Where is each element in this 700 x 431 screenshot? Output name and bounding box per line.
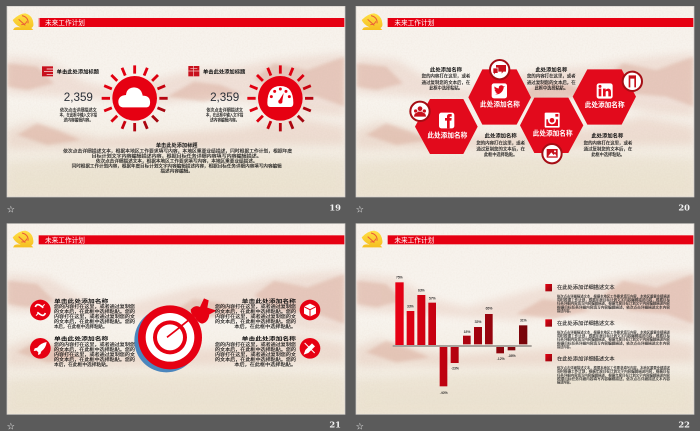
description right: 述内容编辑内容。: [210, 116, 239, 123]
text block: lower right: 单击此处添加名称: [242, 334, 297, 342]
text block: upper right: [215, 297, 297, 330]
description right: 本，在此框中输入文字描: [206, 111, 244, 118]
text block: upper right: 的文本后，在此框中选择粘贴。您的: [215, 308, 297, 315]
legend item 2: 依次点击详细描述文本，根据本地区工作要求填写内容，本地区重要业绩描述: [557, 329, 671, 334]
legend item 2: 描述内容。: [557, 344, 573, 349]
legend item 1: 依次点击详细描述文本，根据本地区工作要求填写内容，本地区重要业绩描述: [557, 293, 671, 298]
legend item 2: 在此处添加详细描述文本: [557, 320, 615, 327]
header bar: [388, 18, 693, 27]
text block: lower left: 的文本后，在此框中选择粘贴。您的: [54, 356, 136, 363]
text block: upper right: 您的内容打在这里，或者通过复制您: [215, 303, 297, 310]
badge: picture: [542, 144, 562, 163]
text block: upper left: 的文本后，在此框中选择粘贴。您的: [54, 308, 136, 315]
bar chart: -23%: [451, 367, 459, 371]
badge: people: [410, 102, 430, 121]
text block: top left: 此框中选择粘贴。: [429, 85, 463, 92]
description right: 依次点击详细描述文: [206, 106, 244, 113]
description left: [60, 106, 98, 123]
text block: upper left: [54, 297, 136, 330]
legend item 3: 同时根据工作计划，根据年度目标计划文字内容编辑描述内容，根据目标: [557, 369, 671, 374]
icon: cube: [300, 300, 320, 320]
text block: lower right: 本后，在此框中选择粘贴。: [234, 361, 296, 368]
bottom text block: 描述内容编辑。: [160, 167, 193, 174]
text block: lower left: [54, 334, 136, 368]
text block: top left: [422, 65, 471, 92]
icon: small list: [42, 66, 53, 76]
text block: upper right: 本后，在此框中选择粘贴。: [234, 323, 296, 330]
legend item 3: [545, 354, 671, 385]
slide background: [356, 6, 694, 197]
text block: upper left: 您的内容打在这里，或者通过复制您: [54, 303, 136, 310]
text block: upper left: 的文本后，在此框中选择粘贴。您的: [54, 318, 136, 325]
text block: upper left: 单击此处添加名称: [54, 297, 109, 305]
text block: top left: 通过复制您的文本后，在: [422, 79, 471, 86]
bottom text block: 目标计划文字内容编辑描述内容，根据目标任务详细内容填写内容编辑描述。: [92, 152, 262, 159]
statistic right: 2,359: [210, 91, 239, 104]
statistic left: 2,359: [64, 91, 93, 104]
text block: top middle: 此处添加名称: [535, 65, 568, 73]
legend item 1: [545, 284, 671, 313]
hexagon: instagram: [520, 98, 583, 153]
legend item 3: 任务详细内容填写内容编辑描述，根据年度目标计划文字内容编辑描述内容: [557, 372, 671, 377]
subheading left: 单击此处添加标题: [57, 67, 100, 75]
bar chart: -12%: [497, 357, 505, 361]
header bar: [39, 18, 344, 27]
header bar: 未来工作计划: [394, 18, 435, 27]
text block: top left: 此处添加名称: [430, 65, 463, 73]
text block: lower right: 的文本后，在此框中选择粘贴。您的: [215, 346, 297, 353]
slide 22: [356, 223, 694, 431]
party emblem logo: [362, 13, 382, 30]
footer icon: ☆: [7, 204, 15, 215]
bottom text block: 单击此处添加标题: [156, 141, 198, 149]
bar chart: 31%: [520, 318, 527, 322]
text block: lower left: 单击此处添加名称: [54, 334, 109, 342]
slide number: 20: [678, 203, 690, 213]
slide background: [7, 223, 345, 415]
text block: lower left: 本后，在此框中选择粘贴。: [54, 361, 111, 368]
text block: top middle: 通过复制您的文本后，在: [527, 79, 576, 86]
sun icon: gauge: [247, 65, 313, 131]
text block: lower right: [215, 334, 297, 368]
text block: bottom right: 通过复制您的文本后，在: [584, 146, 633, 153]
text block: bottom middle: 此处添加名称: [485, 131, 517, 139]
text block: lower right: 的文本后，在此框中选择粘贴。您的: [215, 356, 297, 363]
party emblem logo: [13, 13, 33, 30]
slide number: 19: [329, 203, 341, 213]
text block: bottom right: 您的内容打在这里，或者: [584, 139, 633, 146]
bottom text block: [63, 141, 293, 174]
slide background: [7, 6, 345, 197]
legend item 2: 根据目标任务详细内容填写内容编辑描述，依次点击详细描述文本内容: [557, 340, 671, 345]
text block: upper right: 的文本后，在此框中选择粘贴。您的: [215, 318, 297, 325]
bar chart: 18%: [464, 330, 470, 334]
text block: bottom right: 此框中选择粘贴。: [591, 151, 625, 158]
party emblem logo: [13, 231, 33, 247]
subheading right: 单击此处添加标题: [203, 67, 246, 75]
text block: top middle: 您的内容打在这里，或者: [527, 73, 576, 80]
hexagon: instagram: 此处添加名称: [533, 129, 573, 138]
bar chart: 33%: [475, 320, 481, 324]
text block: top middle: [527, 65, 576, 92]
legend item 1: 同时根据工作计划，根据年度目标计划文字内容编辑描述内容，根据目标: [557, 297, 671, 302]
text block: bottom right: [584, 131, 633, 158]
text block: bottom middle: 此框中选择粘贴。: [484, 151, 517, 158]
bar chart: -08%: [508, 354, 516, 358]
legend item 2: 任务详细内容填写内容编辑描述，根据年度目标计划文字内容编辑描述内容: [557, 337, 671, 342]
legend item 3: 在此处添加详细描述文本: [557, 356, 615, 363]
sun icon: cloud: [102, 65, 168, 131]
hexagon: facebook: [415, 99, 478, 154]
header bar: 未来工作计划: [45, 18, 85, 27]
text block: top left: 您的内容打在这里，或者: [422, 73, 471, 80]
legend item 3: 描述内容。: [557, 380, 573, 385]
bar chart: -40%: [440, 391, 448, 395]
slide 19: [7, 6, 345, 215]
slide number: 21: [329, 420, 341, 430]
text block: bottom middle: [476, 131, 526, 158]
legend item 1: 在此处添加详细描述文本: [557, 284, 615, 291]
hexagon: facebook: 此处添加名称: [427, 130, 468, 139]
text block: lower left: 内容打在这里，或者通过复制您的文: [54, 351, 136, 358]
party emblem logo: [362, 231, 382, 247]
bar chart: 75%: [396, 275, 403, 279]
bar chart: 63%: [418, 288, 425, 292]
legend item 1: 根据目标任务详细内容填写内容编辑描述，依次点击详细描述文本内容: [557, 304, 671, 309]
bottom text block: 依次点击详细描述文本，根据本地区工作要求填写内容，本地区重要业绩描述，同时根据工作计划，根据年度: [63, 147, 293, 154]
legend item 3: 依次点击详细描述文本，根据本地区工作要求填写内容，本地区重要业绩描述: [557, 365, 671, 370]
text block: lower left: 您的内容打在这里，或者通过复制您: [54, 341, 136, 348]
legend item 1: 任务详细内容填写内容编辑描述，根据年度目标计划文字内容编辑描述内容: [557, 301, 671, 306]
icon: small gift: [188, 66, 199, 76]
text block: upper right: 单击此处添加名称: [242, 297, 297, 305]
description left: 依次点击详细描述文: [60, 106, 97, 113]
badge: chat: [490, 60, 509, 79]
slide 20: [356, 6, 694, 215]
description right: [206, 106, 244, 123]
bar chart: 65%: [486, 307, 492, 311]
hexagon: twitter: [468, 69, 531, 125]
text block: bottom middle: 您的内容打在这里，或者: [476, 139, 526, 146]
text block: upper left: 本后，在此框中选择粘贴。: [54, 323, 107, 330]
hexagon: twitter: 此处添加名称: [480, 99, 520, 108]
hexagon: linkedin: [573, 69, 636, 125]
hexagon: linkedin: 此处添加名称: [585, 100, 625, 109]
bar chart: 57%: [429, 296, 436, 300]
header bar: 未来工作计划: [394, 235, 435, 244]
text block: lower right: 您的内容打在这里，或者通过复制您: [215, 341, 297, 348]
legend item 2: [545, 319, 671, 349]
slide background: [356, 223, 694, 415]
text block: top middle: 此框中选择粘贴。: [535, 85, 568, 92]
bottom text block: 同时根据工作计划内容，根据年度目标计划文字内容编辑描述内容，根据目标任务详细内容填写内容编辑: [72, 162, 282, 169]
slide number: 22: [678, 420, 690, 430]
footer icon: ☆: [356, 204, 364, 215]
legend item 2: 同时根据工作计划，根据年度目标计划文字内容编辑描述内容，根据目标: [557, 333, 671, 338]
slide 21: [7, 223, 345, 431]
legend item 1: 描述内容。: [557, 308, 573, 313]
bar chart: [393, 275, 532, 395]
icon: link: [30, 300, 51, 320]
header bar: 未来工作计划: [45, 235, 85, 244]
bottom text block: 依次点击详细描述文本，根据本地区工作要求填写内容，本地区重要业绩描述。: [96, 157, 257, 164]
badge: bookmark: [623, 72, 642, 91]
target graphic with dart: [134, 298, 217, 372]
description left: 本，在此框中输入文字描: [60, 111, 98, 118]
text block: bottom right: 此处添加名称: [591, 131, 624, 139]
header bar: [39, 235, 344, 244]
text block: bottom middle: 通过复制您的文本后，在: [476, 146, 526, 153]
text block: upper left: 内容打在这里，或者通过复制您的文: [54, 313, 136, 320]
bar chart: 33%: [407, 305, 414, 309]
text block: lower left: 的文本后，在此框中选择粘贴。您的: [54, 346, 136, 353]
legend item 3: 根据目标任务详细内容填写内容编辑描述，依次点击详细描述文本内容: [557, 376, 671, 381]
text block: lower right: 内容打在这里，或者通过复制您的文: [215, 351, 297, 358]
header bar: [388, 235, 693, 244]
text block: upper right: 内容打在这里，或者通过复制您的文: [215, 313, 297, 320]
description left: 述内容编辑内容。: [64, 116, 93, 123]
icon: rocket: [30, 338, 51, 359]
icon: pencil: [300, 338, 320, 359]
